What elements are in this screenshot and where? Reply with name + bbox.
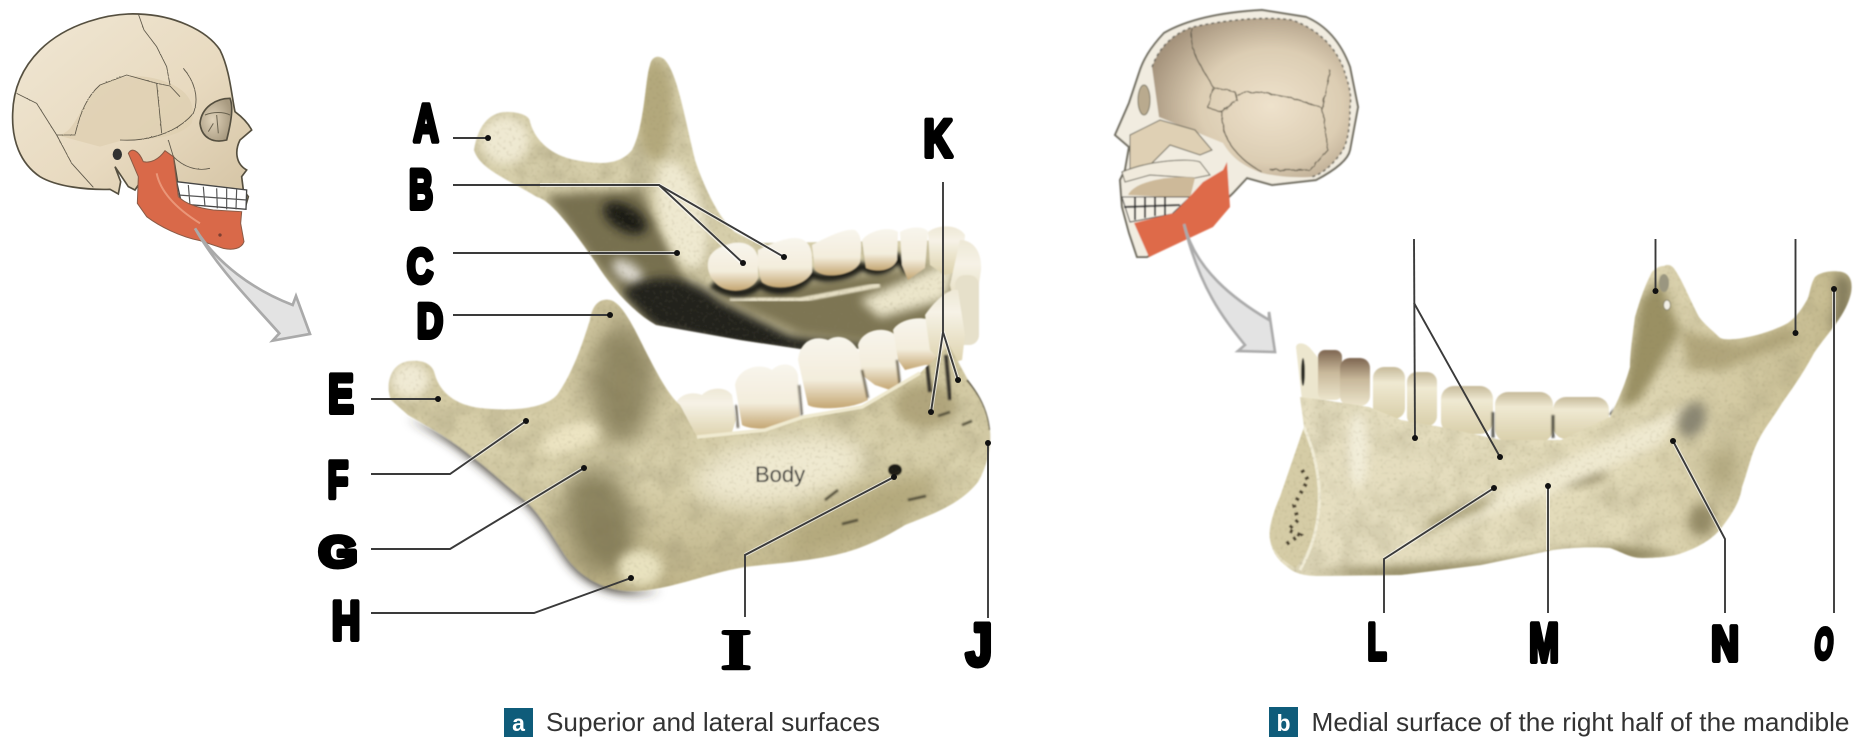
arrow b bbox=[1184, 224, 1275, 352]
caption a: a bbox=[512, 710, 525, 736]
upper and lower teeth bbox=[177, 182, 247, 209]
mandibular symphysis section bbox=[1270, 427, 1320, 568]
label N bbox=[1670, 438, 1739, 672]
gum ridge bbox=[697, 373, 920, 437]
caption a: Superior and lateral surfaces bbox=[546, 707, 880, 737]
label C: C bbox=[407, 240, 433, 293]
label M bbox=[1529, 483, 1559, 673]
label L: L bbox=[1367, 613, 1387, 672]
label G: G bbox=[319, 528, 357, 576]
lower teeth behind bone bbox=[675, 290, 965, 438]
caption b: b bbox=[1276, 710, 1291, 736]
skull section outline bbox=[1115, 10, 1358, 257]
mandible highlight bbox=[157, 173, 200, 223]
orbit bbox=[200, 98, 232, 141]
label L bbox=[1367, 485, 1497, 672]
orbit inner detail bbox=[205, 112, 230, 133]
teeth grid bbox=[1124, 197, 1180, 220]
teeth bbox=[1122, 197, 1190, 222]
mandible b body bbox=[1269, 265, 1852, 576]
lower shadow edge bbox=[408, 418, 660, 594]
cranium outline bbox=[13, 14, 252, 208]
upper leader lines b bbox=[1412, 239, 1798, 460]
mandible a, upper half bbox=[470, 50, 981, 360]
mandible b shading bbox=[1265, 260, 1860, 580]
label O: O bbox=[1813, 621, 1835, 668]
dark backing beneath the crowns bbox=[712, 258, 908, 293]
label H: H bbox=[332, 591, 360, 652]
label N: N bbox=[1711, 617, 1739, 672]
mental foramen bbox=[888, 464, 902, 476]
label I bbox=[721, 474, 897, 681]
highlighted mandible bbox=[1134, 162, 1230, 257]
lower ramus and body bbox=[389, 300, 990, 591]
label J: J bbox=[966, 611, 992, 679]
oral cavity shade bbox=[1128, 177, 1195, 198]
spongy bone speckle bbox=[1285, 470, 1308, 545]
cranial cavity bbox=[1152, 18, 1351, 177]
label F: F bbox=[328, 451, 348, 509]
label O bbox=[1813, 286, 1837, 668]
upper ramus and body bbox=[474, 57, 975, 352]
label B bbox=[409, 158, 787, 266]
mental foramen bbox=[218, 233, 222, 237]
label J bbox=[966, 440, 992, 679]
mandible b bbox=[1265, 260, 1860, 580]
label G bbox=[319, 465, 587, 576]
label H bbox=[332, 575, 634, 652]
sutures bbox=[17, 14, 210, 187]
label E bbox=[328, 364, 441, 425]
teeth b bbox=[1296, 343, 1628, 442]
sutures bbox=[1191, 28, 1330, 172]
label K bbox=[924, 109, 961, 415]
label F bbox=[328, 418, 529, 509]
highlighted mandible bbox=[128, 150, 244, 249]
upper teeth bbox=[708, 226, 981, 345]
white-ish bony region near the front bbox=[1348, 412, 1368, 488]
sinus bbox=[1138, 85, 1150, 115]
pterygoid dimple bbox=[1659, 274, 1669, 292]
ear opening bbox=[113, 149, 122, 160]
mandibular foramen and notch bbox=[1664, 300, 1670, 310]
caption b: Medial surface of the right half of the mandible bbox=[1312, 707, 1850, 737]
sphenoid and nasal region bbox=[1130, 120, 1212, 172]
label D bbox=[417, 295, 613, 348]
label E: E bbox=[328, 364, 354, 425]
label I: I bbox=[721, 619, 751, 681]
label B: B bbox=[409, 158, 433, 221]
upper half shading bbox=[474, 57, 952, 350]
label D: D bbox=[417, 295, 443, 348]
label M: M bbox=[1529, 612, 1559, 673]
label C bbox=[407, 240, 680, 293]
label Body: Body bbox=[755, 462, 805, 487]
label K: K bbox=[924, 109, 952, 168]
lower half shading bbox=[385, 295, 995, 595]
label A bbox=[413, 93, 491, 153]
temporal fossa shade bbox=[57, 76, 193, 147]
mandible a, lower half bbox=[385, 290, 995, 595]
label A: A bbox=[413, 93, 439, 153]
skull illustration a bbox=[13, 14, 310, 341]
stippled diploe rim bbox=[1152, 18, 1351, 177]
hard palate band bbox=[1122, 160, 1210, 182]
skull illustration b bbox=[1115, 10, 1358, 352]
arrow a bbox=[195, 228, 310, 341]
